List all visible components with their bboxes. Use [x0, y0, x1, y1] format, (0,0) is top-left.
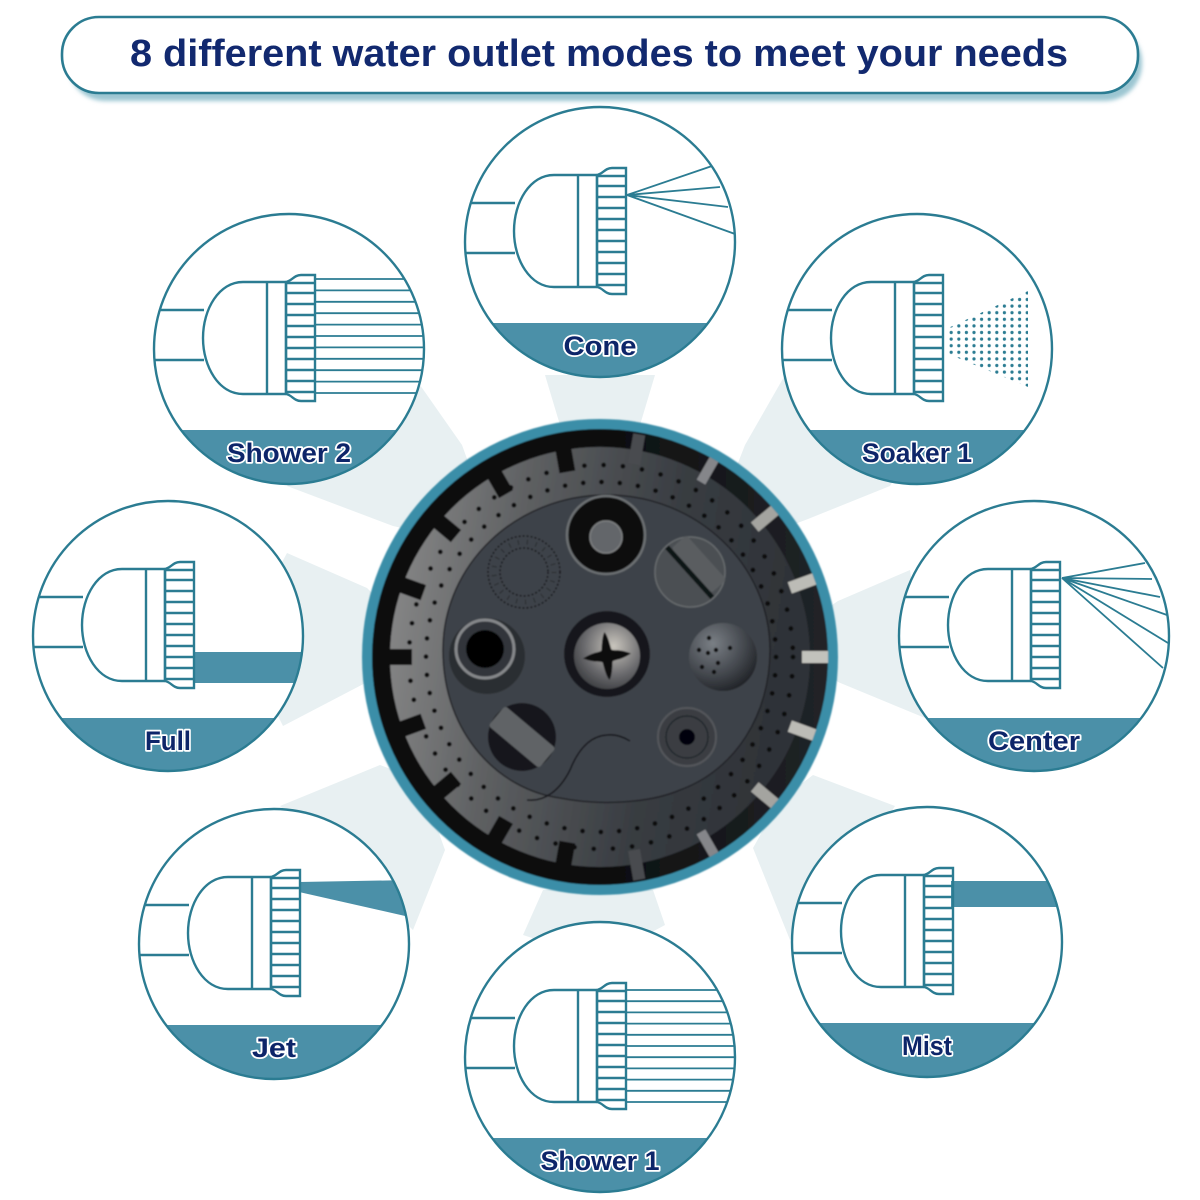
- center screw: [564, 611, 650, 697]
- mode: Soaker 1: Soaker 1: [862, 438, 972, 468]
- mode: Soaker 1: [782, 214, 1052, 490]
- mode: Jet: Jet: [252, 1033, 296, 1063]
- mode: Shower 2: Shower 2: [227, 438, 351, 468]
- raised bump contour: [527, 735, 630, 800]
- connector beams from hub to mode circles: [240, 375, 930, 960]
- central nozzle face photo illustration: [367, 424, 833, 890]
- title banner: [62, 17, 1142, 101]
- lower left slotted outlet: [474, 689, 570, 785]
- right ball outlet: [689, 623, 757, 691]
- mode: Shower 2: [154, 214, 424, 490]
- mode: Cone: [465, 107, 735, 383]
- dark teeth: [374, 433, 575, 881]
- mode: Full: [33, 501, 309, 778]
- mode: Cone: Cone: [564, 331, 636, 361]
- outer teal ring: [367, 424, 833, 890]
- mode: Jet: [139, 809, 414, 1085]
- upper right slotted outlet: [641, 523, 739, 621]
- spray holes: [409, 465, 793, 849]
- mode: Center: [899, 501, 1169, 778]
- mode: Shower 1: [465, 922, 735, 1198]
- perforated annulus: [390, 447, 810, 867]
- inner disc: [443, 495, 770, 802]
- mode: Mist: [792, 807, 1067, 1083]
- mode: Shower 1: Shower 1: [540, 1146, 660, 1176]
- lower right outlet: [658, 708, 716, 766]
- mode: Mist: Mist: [902, 1031, 952, 1061]
- left round outlet: [449, 618, 525, 694]
- title banner: 8 different water outlet modes to meet your needs: [130, 33, 1068, 75]
- mode: Center: Center: [988, 726, 1081, 756]
- engraved ring: [488, 536, 560, 608]
- mode: Full: Full: [145, 726, 191, 756]
- light teeth: [628, 433, 828, 881]
- top cap outlet: [567, 496, 645, 574]
